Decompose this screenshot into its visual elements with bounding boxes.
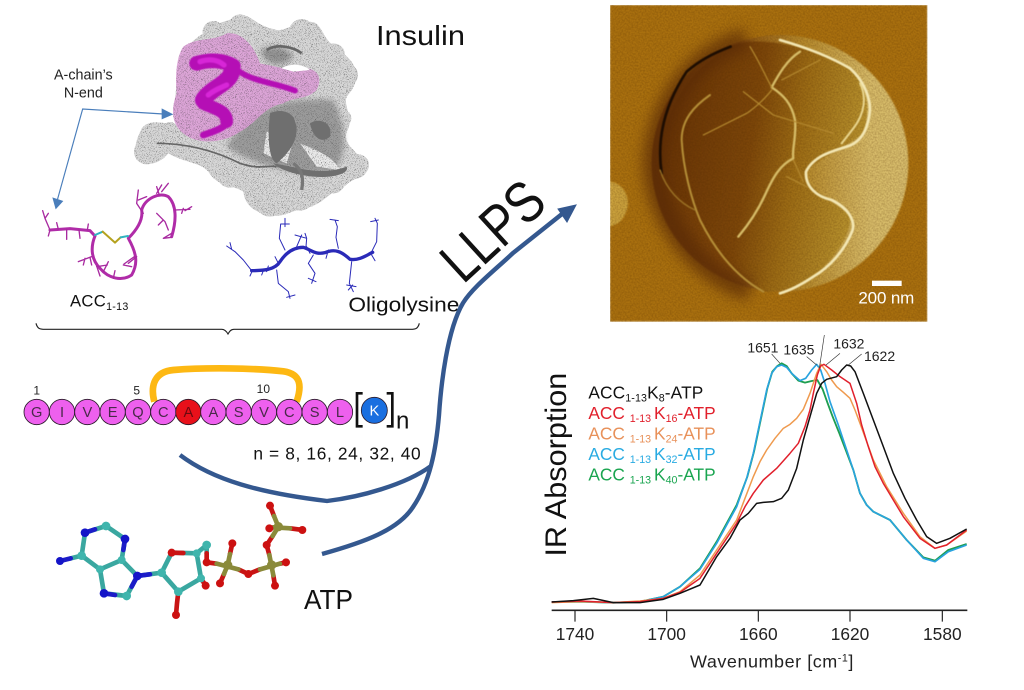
- x axis title: ]: [848, 651, 853, 671]
- residue letters: A: [208, 405, 218, 421]
- title: Insulin: Insulin: [376, 20, 465, 51]
- residue numbers: 10: [257, 382, 270, 396]
- residue letters: Q: [132, 405, 144, 421]
- x tick labels: 1700: [647, 624, 686, 644]
- legend: K: [654, 464, 666, 484]
- label: A-chain's N-end: A-chain’s: [54, 67, 113, 83]
- molecule: ACC1-13 stick model: [43, 183, 192, 278]
- AFM background and droplet: [610, 5, 927, 322]
- label: ACC1-13: 1-13: [106, 301, 128, 313]
- x tick labels: [556, 624, 962, 644]
- legend: 24: [666, 433, 678, 445]
- peak labels: 1632: [833, 335, 865, 351]
- legend: ACC: [588, 382, 625, 402]
- label: A-chain's N-end: [54, 67, 113, 101]
- repeat bracket: [357, 393, 392, 426]
- legend: ACC: [588, 423, 625, 443]
- legend: 1-13: [630, 454, 654, 466]
- residue letters: I: [60, 405, 64, 421]
- spectra curves: [552, 363, 967, 603]
- label: Oligolysine: Oligolysine: [348, 294, 459, 317]
- legend: 1-13: [630, 474, 654, 486]
- magenta mesh region: [173, 33, 319, 141]
- residue letters: G: [31, 405, 42, 421]
- x tick labels: 1580: [923, 624, 962, 644]
- panel: peptide sequence: [24, 368, 421, 619]
- legend: -ATP: [677, 444, 716, 464]
- dark grey ribbon: [269, 111, 347, 177]
- protein mesh surface: [134, 14, 369, 217]
- legend: 40: [666, 474, 678, 486]
- residue numbers: 1: [33, 383, 40, 397]
- peak labels: 1635: [783, 341, 815, 357]
- legend: K: [654, 444, 666, 464]
- y axis title: IR Absorption: [540, 373, 573, 557]
- x axis title: -1: [838, 652, 848, 664]
- legend: ACC: [588, 464, 625, 484]
- disulfide bridge: [153, 368, 300, 402]
- x tick labels: 1620: [831, 624, 869, 644]
- arrows: A-chain's N-end pointers: [52, 108, 173, 209]
- label: ACC1-13: ACC: [70, 292, 106, 311]
- legend: -ATP: [677, 464, 716, 484]
- legend: K: [654, 423, 666, 443]
- panel: IR spectrum chart: [540, 335, 967, 671]
- scale label: 200 nm: [858, 288, 914, 307]
- legend: -ATP: [677, 403, 716, 423]
- x tick labels: 1660: [739, 624, 778, 644]
- label: LLPS: LLPS: [428, 168, 558, 295]
- x axis: [552, 610, 967, 622]
- residue beads: [24, 397, 387, 425]
- peak labels: 1622: [864, 348, 895, 364]
- molecule: oligolysine stick model: [227, 218, 378, 298]
- residue letters: V: [259, 405, 269, 421]
- label: ATP: ATP: [304, 584, 353, 615]
- subscript n: n: [396, 408, 409, 435]
- legend: 8: [659, 392, 665, 404]
- panel: insulin structure: [36, 14, 465, 334]
- residue numbers: [33, 382, 270, 397]
- legend: ACC: [588, 444, 625, 464]
- peak labels: 1651: [747, 340, 779, 356]
- legend: -ATP: [665, 382, 703, 402]
- legend: 1-13: [630, 413, 654, 425]
- residue letters: K: [369, 403, 379, 419]
- brace: [36, 323, 419, 334]
- peak leader lines: [772, 335, 862, 368]
- magenta helix ribbon: [197, 60, 295, 135]
- scale bar: [872, 281, 902, 286]
- residue letters: S: [310, 405, 320, 421]
- x axis title: Wavenumber [cm: [690, 651, 837, 671]
- residue letters: S: [234, 405, 244, 421]
- residue letters: V: [82, 405, 92, 421]
- droplet shadow: [653, 40, 750, 290]
- legend: 16: [666, 413, 678, 425]
- n values: n = 8, 16, 24, 32, 40: [253, 443, 421, 463]
- residue letters: [31, 403, 379, 421]
- residue numbers: 5: [133, 383, 140, 397]
- legend: 32: [666, 454, 678, 466]
- molecule: ATP: [56, 502, 306, 619]
- legend: [588, 382, 716, 486]
- label: A-chain's N-end: N-end: [64, 85, 103, 101]
- residue letters: C: [284, 405, 295, 421]
- arrow: merging LLPS arrow: [180, 205, 576, 554]
- legend: 1-13: [630, 433, 654, 445]
- shaded mesh patches: [227, 47, 344, 173]
- legend: 1-13: [625, 392, 647, 404]
- residue letters: A: [183, 405, 193, 421]
- fibrils: [660, 40, 870, 293]
- legend: K: [654, 403, 666, 423]
- residue letters: L: [336, 405, 344, 421]
- legend: K: [647, 382, 659, 402]
- residue letters: C: [158, 405, 169, 421]
- peak labels: [747, 335, 895, 364]
- panel: AFM image: [610, 5, 927, 322]
- legend: -ATP: [677, 423, 716, 443]
- x tick labels: 1740: [556, 624, 594, 644]
- legend: ACC: [588, 403, 625, 423]
- residue letters: E: [108, 405, 118, 421]
